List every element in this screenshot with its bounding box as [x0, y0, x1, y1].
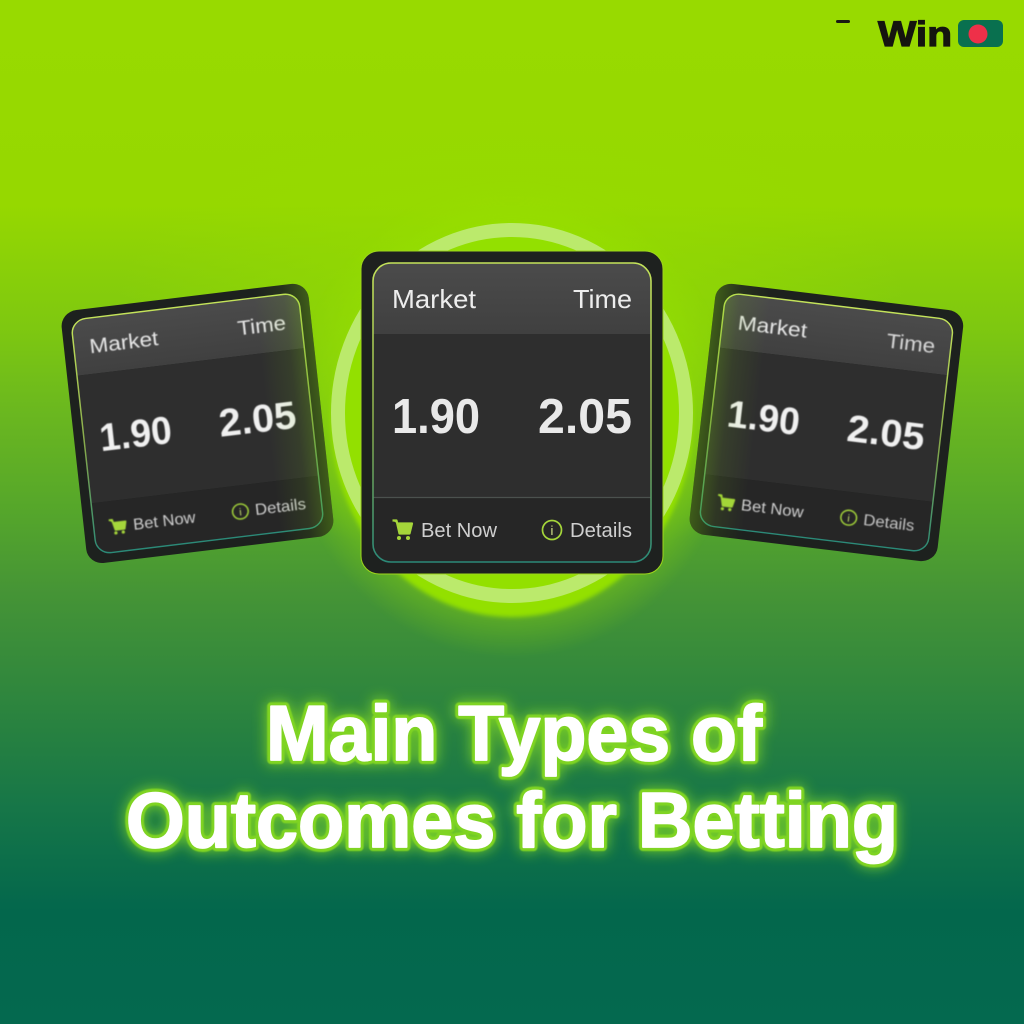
right card labels and odds: Bet Now [740, 497, 805, 522]
central card footer band [373, 498, 651, 562]
title glow [126, 689, 898, 864]
right card labels and odds: Market [737, 312, 808, 343]
logo wordmark: Win [878, 15, 952, 54]
right card header band [719, 292, 954, 375]
central card [361, 251, 663, 574]
title glow: Outcomes for Betting [126, 776, 898, 864]
left card labels and odds: Bet Now [132, 509, 197, 534]
left card header band [71, 293, 304, 376]
left card labels and odds: 2.05 [217, 394, 298, 446]
title lime outline [126, 689, 898, 864]
title glow: Main Types of [266, 689, 763, 777]
right card labels and odds: Details [862, 511, 915, 535]
central lime wash [112, 100, 912, 560]
title lime outline: Outcomes for Betting [126, 776, 898, 864]
left card labels and odds: i [239, 507, 242, 518]
title [126, 689, 898, 864]
logo mark dash [836, 20, 850, 23]
header label: Market: Market [392, 284, 477, 314]
right card labels and odds: i [847, 514, 850, 525]
right card labels and odds: 1.90 [725, 393, 802, 444]
footer label: Details: Details [570, 520, 632, 542]
right card labels and odds: Time [885, 330, 936, 358]
right card frame [688, 282, 965, 563]
footer label: Bet Now: Bet Now [421, 520, 498, 542]
left card labels and odds: Time [236, 312, 287, 340]
left card labels and odds [88, 312, 307, 537]
left card odds area [77, 348, 319, 503]
right card labels and odds: 2.05 [845, 407, 927, 459]
icon: info [542, 520, 562, 540]
header label: Time: Time [573, 284, 632, 314]
icon: Bangladesh flag [958, 20, 1003, 47]
right card labels and odds [716, 312, 936, 535]
left card inner border [71, 293, 324, 554]
left tilted card [60, 282, 335, 565]
right tilted card [688, 282, 965, 563]
central card odds area [373, 334, 651, 497]
title line 1: Main Types of [266, 689, 763, 777]
central card frame [361, 251, 663, 574]
title lime outline: Main Types of [266, 689, 763, 777]
central card inner border [373, 263, 651, 562]
right card footer band [699, 474, 933, 552]
right card glow overlay [688, 282, 965, 563]
left card labels and odds: Details [254, 495, 307, 519]
logo [836, 15, 1003, 54]
glowing ring behind central card [290, 182, 734, 658]
right card inner border [699, 292, 954, 552]
odds: 1.90: 1.90 [392, 390, 480, 444]
left card labels and odds: 1.90 [97, 409, 174, 460]
left card frame [60, 282, 335, 565]
left card glow overlay [60, 282, 335, 565]
icon: info: i [551, 523, 554, 538]
central card header band [373, 263, 651, 334]
left card labels and odds: Market [88, 328, 160, 358]
odds: 2.05: 2.05 [538, 390, 632, 444]
right card odds area [705, 348, 948, 502]
icon: cart [392, 520, 412, 540]
title line 2: Outcomes for Betting [126, 776, 898, 864]
left card footer band [91, 476, 324, 554]
